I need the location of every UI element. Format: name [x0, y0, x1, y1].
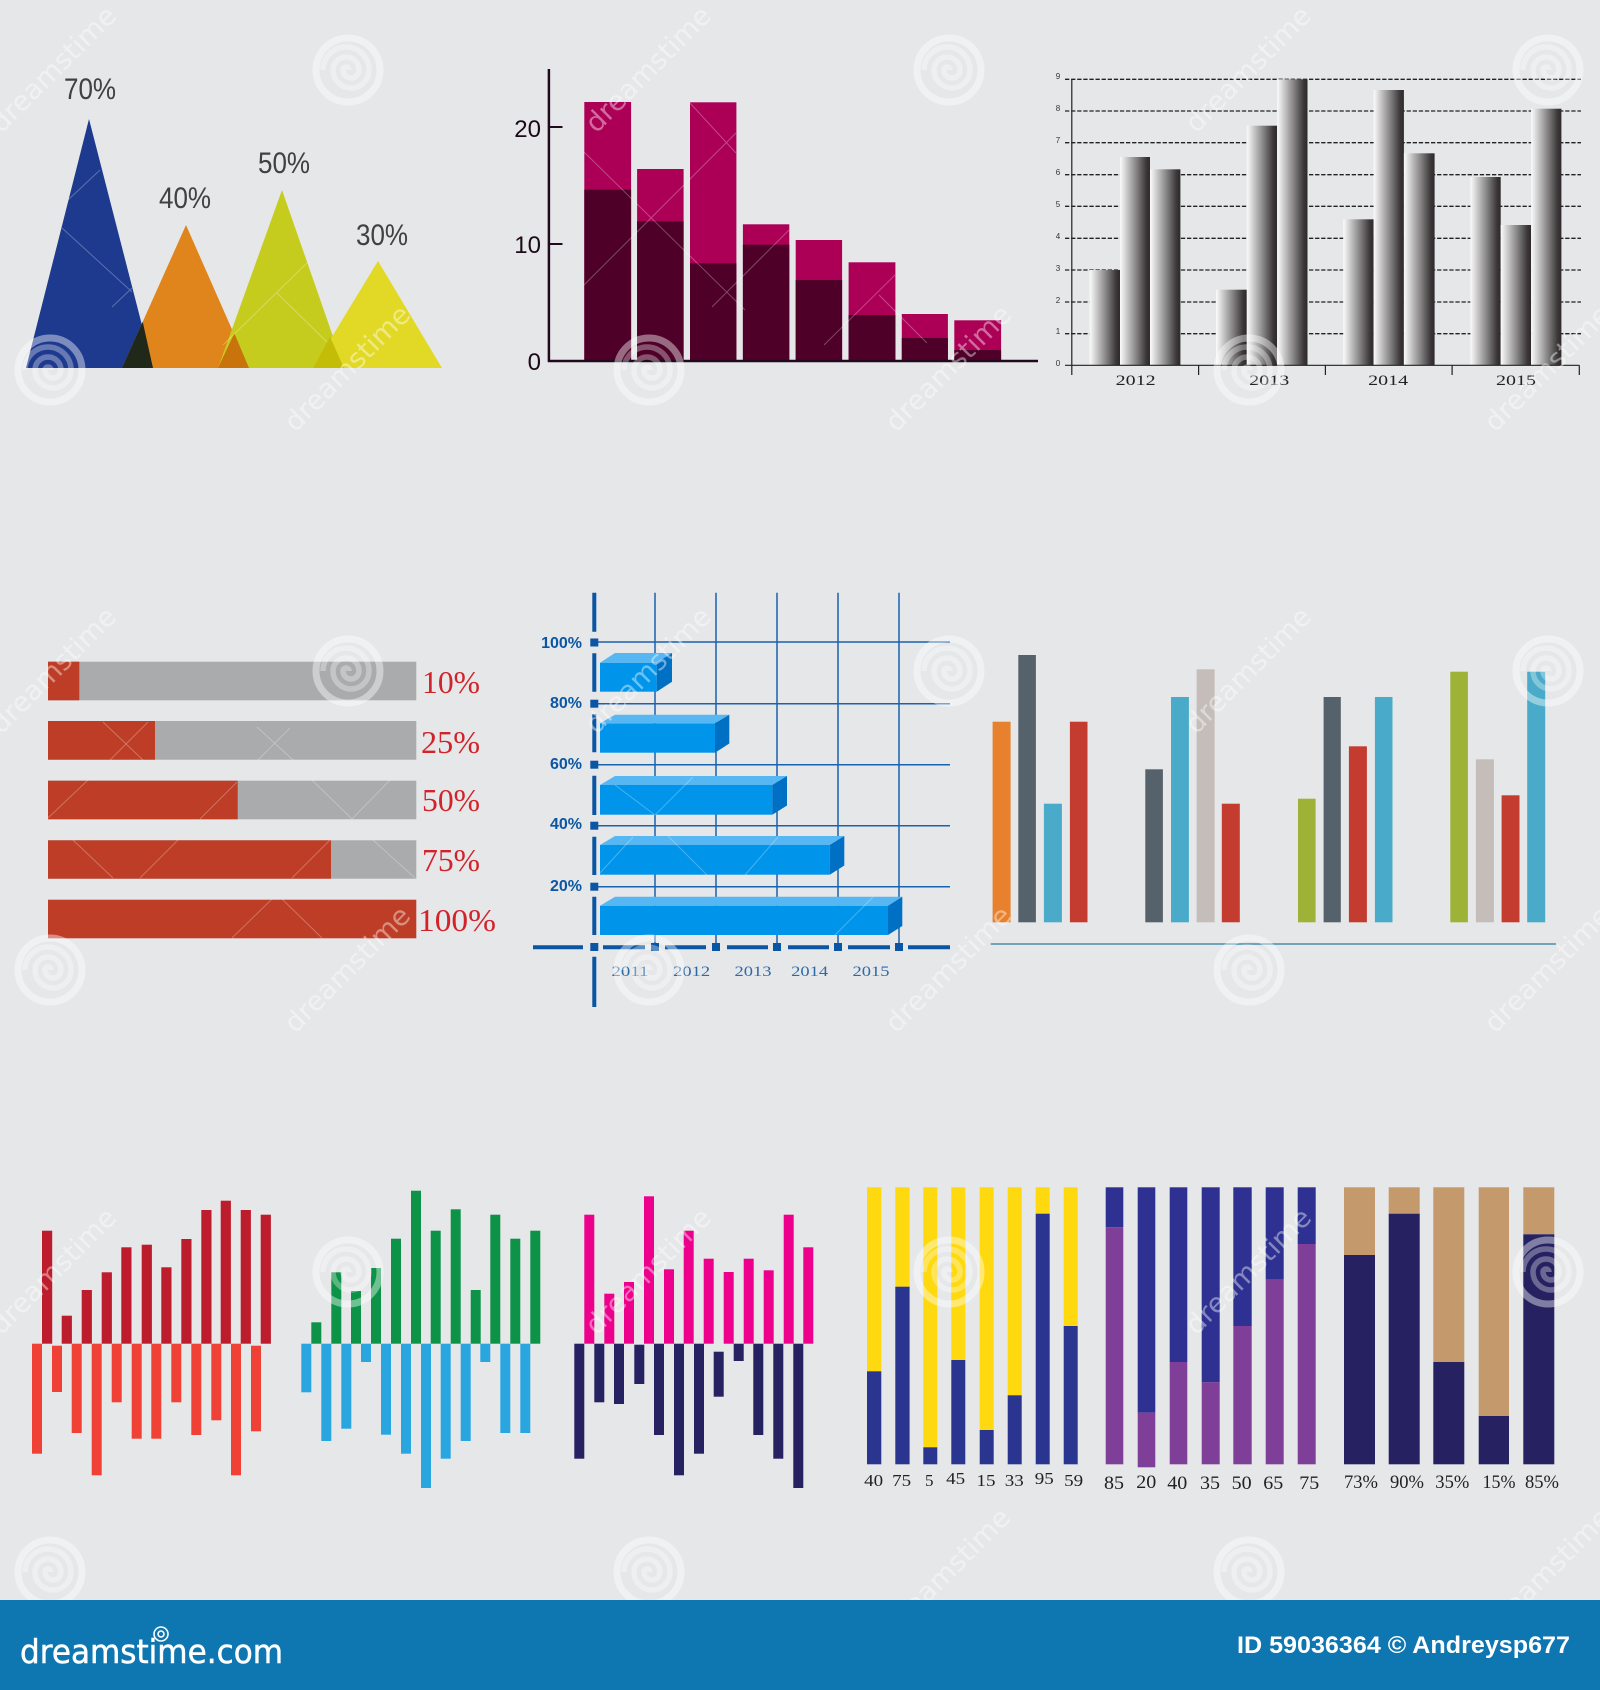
- watermark text: dreamstime: [579, 601, 718, 740]
- value labels: 59: [1064, 1471, 1083, 1490]
- value labels: 5: [925, 1471, 934, 1490]
- y axis labels: 6: [1056, 168, 1061, 177]
- watermark text: dreamstime: [278, 299, 417, 438]
- watermark text: dreamstime: [878, 1502, 1017, 1641]
- watermark text: dreamstime: [1179, 0, 1318, 139]
- lower bars: [301, 1344, 530, 1488]
- year labels: 2014: [791, 964, 829, 980]
- y axis labels: 5: [1056, 200, 1061, 209]
- 3D bar 3: [600, 776, 787, 815]
- panel: tan and navy stacked columns: [1344, 1187, 1559, 1493]
- bar group 1: [993, 655, 1088, 922]
- 3D bar 2: [600, 715, 729, 753]
- year labels: 2013: [734, 964, 772, 980]
- overlap orange and lime: [218, 333, 249, 368]
- axes: [548, 69, 1038, 362]
- value labels: 33: [1005, 1471, 1024, 1490]
- overlap lime and yellow: [313, 337, 344, 368]
- year labels: 2011: [612, 964, 648, 980]
- axis labels: 10: [514, 232, 541, 259]
- yellow segments: [867, 1187, 1078, 1447]
- year labels: [612, 964, 890, 980]
- footer image id and author: ID 59036364 © Andreysp677: [1237, 1632, 1570, 1659]
- value labels: 95: [1035, 1469, 1054, 1488]
- grid lines: [594, 593, 950, 947]
- percent labels: 10%: [422, 664, 480, 700]
- dashed grid lines: [1065, 79, 1581, 334]
- percent labels: 50%: [422, 782, 480, 818]
- y axis labels: 0: [1056, 359, 1061, 368]
- value labels: 85: [1104, 1473, 1124, 1494]
- 3D bar 4: [600, 836, 844, 875]
- value labels: 20: [1136, 1472, 1156, 1493]
- percent labels: 40%: [550, 816, 582, 833]
- value labels: 15: [976, 1471, 996, 1490]
- upper bars: [42, 1201, 271, 1344]
- panel: grouped color bars: [991, 655, 1556, 945]
- y axis labels: [1056, 72, 1061, 368]
- labels: 70%: [64, 73, 116, 106]
- red fills: [48, 662, 416, 938]
- watermark text: dreamstime: [1179, 1202, 1318, 1341]
- upper bars: [584, 1196, 813, 1344]
- value labels: 50: [1232, 1473, 1252, 1494]
- value labels: 45: [946, 1469, 965, 1488]
- blue segments: [1106, 1187, 1316, 1413]
- percent labels: 35%: [1435, 1473, 1469, 1493]
- axis labels: 0: [528, 349, 541, 376]
- labels: [64, 73, 408, 252]
- percent labels: 100%: [541, 635, 582, 652]
- value labels: [864, 1469, 1083, 1490]
- watermark text: dreamstime: [1179, 601, 1318, 740]
- y axis labels: 4: [1056, 232, 1061, 241]
- dark bars: [584, 190, 1001, 361]
- panel: mirrored pink and navy bars: [574, 1196, 813, 1488]
- percent labels: 75%: [422, 842, 480, 878]
- purple segments: [1106, 1227, 1316, 1467]
- value labels: 75: [1299, 1473, 1319, 1494]
- panel: blue and purple stacked columns: [1104, 1187, 1319, 1494]
- magenta bars: [584, 102, 1001, 361]
- lower bars: [574, 1344, 803, 1488]
- panel: stacked magenta bar chart: [514, 69, 1038, 376]
- axes: [1065, 79, 1579, 375]
- percent labels: [1344, 1473, 1559, 1493]
- 3D bar 5: [600, 897, 902, 935]
- percent labels: [418, 664, 496, 938]
- triangle 30% yellow: [313, 261, 442, 368]
- percent labels: 85%: [1525, 1473, 1559, 1493]
- bar group 2012: [1090, 157, 1180, 365]
- upper bars: [311, 1191, 540, 1344]
- value labels: 65: [1263, 1473, 1283, 1494]
- panel: metallic gradient bar chart: [1056, 72, 1581, 389]
- axes dashed: [533, 593, 950, 1007]
- value labels: 75: [892, 1471, 911, 1490]
- panel: triangle chart: [26, 73, 442, 368]
- panel: horizontal progress bars: [48, 662, 496, 938]
- panel: yellow and blue stacked columns: [864, 1187, 1083, 1490]
- labels: 50%: [258, 147, 310, 180]
- percent labels: 15%: [1482, 1473, 1516, 1493]
- y axis labels: 2: [1056, 296, 1061, 305]
- x axis labels: 2012: [1116, 373, 1156, 389]
- axis labels: 20: [514, 116, 541, 143]
- grey tracks: [48, 662, 416, 879]
- x axis labels: 2015: [1496, 373, 1536, 389]
- y axis labels: 8: [1056, 104, 1061, 113]
- bar group 2: [1145, 669, 1240, 922]
- bar group 4: [1450, 672, 1545, 922]
- value labels: 35: [1200, 1473, 1220, 1494]
- bar group 3: [1298, 697, 1392, 922]
- navy segments: [1344, 1214, 1554, 1464]
- percent labels: [541, 635, 582, 895]
- bar group 2014: [1343, 90, 1435, 365]
- value labels: 40: [864, 1471, 883, 1490]
- panel: mirrored red bars: [32, 1201, 271, 1475]
- triangle 70% blue: [26, 119, 153, 368]
- percent labels: 73%: [1344, 1473, 1378, 1493]
- bar group 2015: [1470, 109, 1561, 365]
- x axis labels: 2013: [1249, 373, 1289, 389]
- labels: 40%: [159, 182, 211, 215]
- watermark text: dreamstime: [579, 1202, 718, 1341]
- percent labels: 20%: [550, 878, 582, 895]
- axis labels: [514, 116, 541, 376]
- footer banner: [0, 1600, 1600, 1690]
- y axis labels: 7: [1056, 136, 1061, 145]
- x axis labels: 2014: [1368, 373, 1409, 389]
- lower bars: [32, 1344, 261, 1475]
- tan segments: [1344, 1187, 1554, 1416]
- triangle 50% lime: [218, 190, 344, 368]
- panel: mirrored green and blue bars: [301, 1191, 540, 1488]
- percent labels: 25%: [421, 724, 480, 760]
- percent labels: 100%: [418, 902, 496, 938]
- watermark text: dreamstime: [278, 900, 417, 1039]
- value labels: [1104, 1472, 1319, 1494]
- triangle 40% orange: [122, 225, 249, 368]
- y axis labels: 9: [1056, 72, 1061, 81]
- labels: 30%: [356, 219, 408, 252]
- overlap blue and orange: [122, 322, 153, 368]
- 3D bar 1: [600, 653, 672, 692]
- panel: blue 3D horizontal bar chart: [533, 593, 950, 1007]
- footer logo text: dreamstime.com: [20, 1632, 283, 1671]
- icon: logo spiral: [154, 1627, 168, 1641]
- y axis labels: 3: [1056, 264, 1061, 273]
- value labels: 40: [1167, 1473, 1187, 1494]
- blue segments: [867, 1214, 1078, 1464]
- watermark text: dreamstime: [579, 0, 718, 139]
- watermark text: dreamstime: [879, 900, 1018, 1039]
- percent labels: 90%: [1390, 1473, 1424, 1493]
- bar group 2013: [1216, 79, 1308, 365]
- y axis labels: 1: [1056, 327, 1061, 336]
- percent labels: 60%: [550, 756, 582, 773]
- axis markers: [590, 638, 903, 951]
- year labels: 2012: [673, 964, 710, 980]
- watermark text: dreamstime: [879, 299, 1018, 438]
- year labels: 2015: [852, 964, 890, 980]
- percent labels: 80%: [550, 695, 582, 712]
- x axis labels: [1116, 373, 1536, 389]
- baseline: [991, 943, 1556, 945]
